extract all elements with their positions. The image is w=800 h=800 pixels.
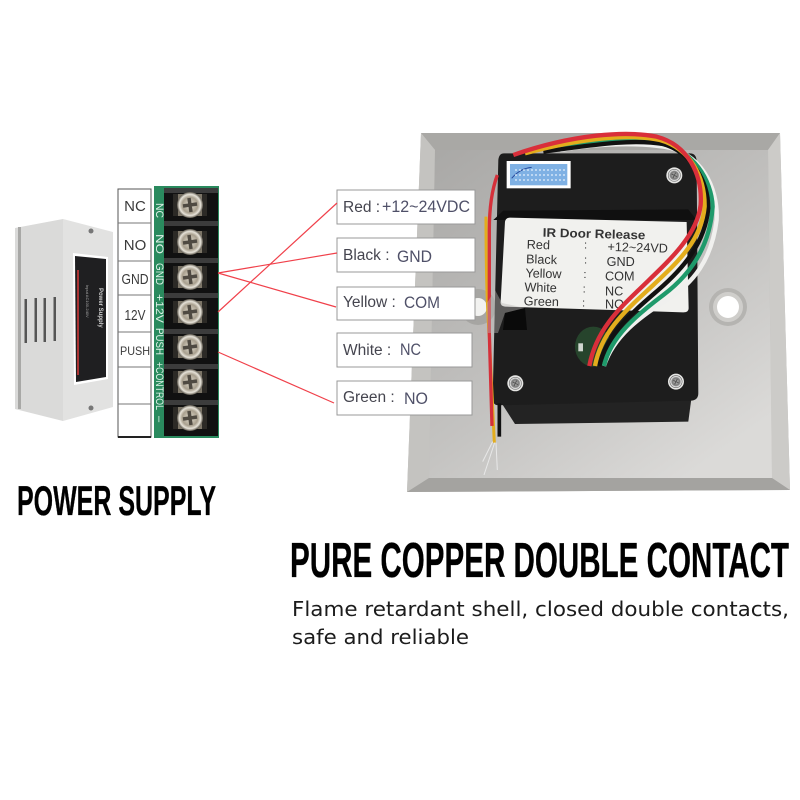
label: black wire: GND [397,248,432,266]
label: green wire [337,381,472,415]
table: terminal names: PUSH [120,344,150,358]
box screws [88,228,94,410]
product label: : [583,269,586,281]
label: yellow wire: COM [404,294,440,312]
terminal separators [164,188,218,405]
table: terminal names: GND [122,271,149,288]
terminal block [153,186,219,438]
label: red wire [337,190,475,224]
wire labels [337,190,475,415]
product label: : [584,239,587,251]
box black label: Input AC100-240V [85,285,90,318]
body text: safe and reliable [292,625,469,649]
PCB silkscreen labels: +CONTROL [153,362,165,410]
label: white wire: White : [343,342,391,359]
PCB silkscreen labels: +12V [153,294,165,324]
module wire hole [575,327,612,367]
label: white wire [337,333,472,367]
label: white wire: NC [400,341,421,359]
PCB silkscreen labels: – [153,416,165,423]
terminal screws [173,192,207,431]
table: terminal names: 12V [124,307,146,324]
table: terminal names [118,189,151,437]
connector lines [218,203,337,403]
product label: Black [526,252,558,267]
icon: left mounting hole [460,289,496,325]
box black label [73,253,108,385]
label: red wire: Red : [343,199,380,216]
PCB silkscreen labels: NO [153,234,165,255]
product label: : [584,254,587,266]
left wire tails [483,175,499,475]
box ventilation slots [24,297,56,343]
product label [501,218,689,312]
icon: housing screws [507,167,684,391]
product label: White [524,280,557,295]
product label: Yellow [525,266,563,281]
label: red wire: +12~24VDC [382,198,470,216]
wire bundle [513,134,717,366]
PCB silkscreen labels: GND [153,263,165,285]
label: yellow wire: Yellow : [343,294,396,311]
product label: NC [605,284,623,298]
PCB silkscreen labels: PUSH [153,328,165,355]
product label: Green [524,294,559,309]
tape on wires [487,290,527,333]
label: green wire: NO [404,390,428,408]
box black label: Power Supply [97,288,103,328]
body text: Flame retardant shell, closed double contacts, [292,597,789,621]
product label: COM [605,270,635,284]
product label: : [582,298,585,310]
module black housing [493,153,698,405]
product label: GND [607,255,635,269]
blue sticker [507,161,571,188]
PCB silkscreen labels: NC [153,203,165,218]
product label: +12~24VD [607,240,668,256]
product label: Red [527,238,550,252]
icon: right mounting hole [709,288,747,326]
label: black wire [337,238,475,272]
product label: : [583,284,586,296]
photo: stainless steel switch plate [407,133,790,492]
PCB silkscreen labels [153,203,165,423]
table: terminal names: NC [124,198,146,215]
photo: power supply box [15,219,113,421]
module lower housing shadow [502,397,692,424]
product label: IR Door Release [543,226,646,242]
label: green wire: Green : [343,389,395,406]
photo: IR door release module [483,134,717,475]
heading: power supply: POWER SUPPLY [17,477,216,524]
table: terminal names: NO [124,237,146,254]
label: black wire: Black : [343,247,390,264]
label: yellow wire [337,287,475,320]
product label: NO [605,298,624,312]
